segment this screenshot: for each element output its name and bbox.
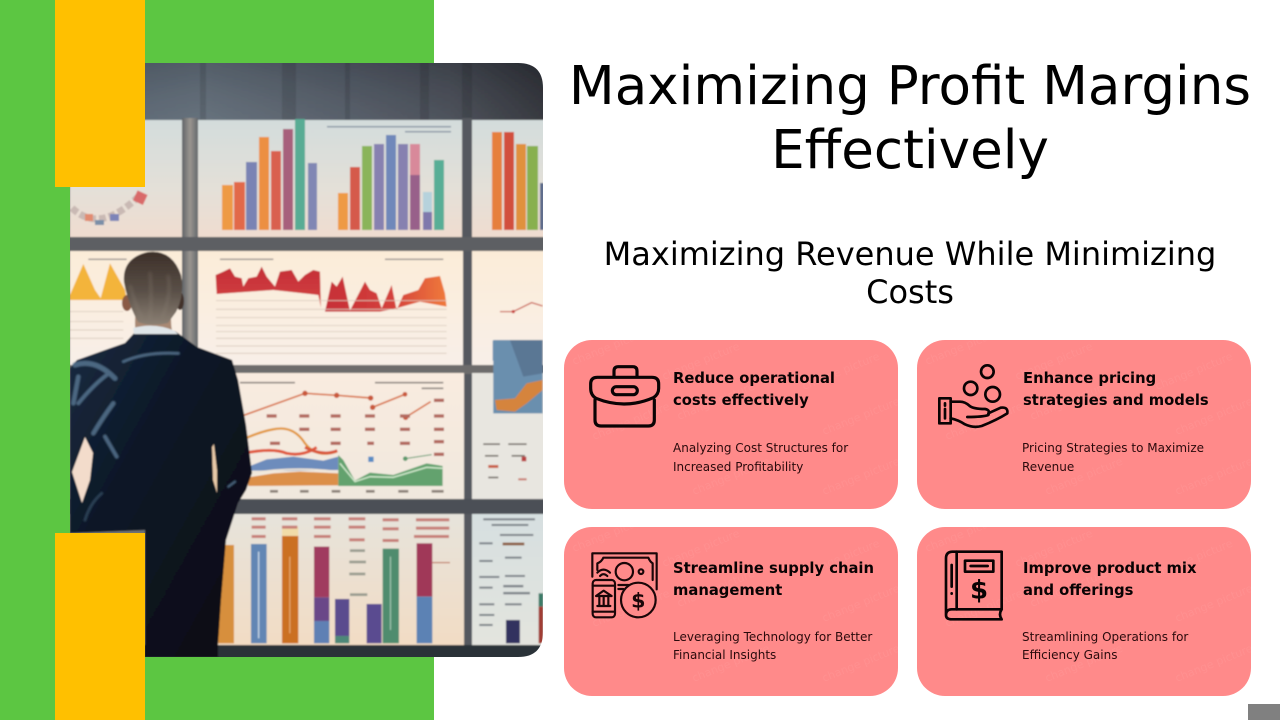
card: streamline supply chain: change picture [690,642,772,685]
card: improve product mix: change picture [1043,642,1125,685]
icon: book with dollar sign [944,550,1004,621]
card: streamline supply chain: change picture [675,567,757,610]
subtitle [604,235,1216,311]
card: enhance pricing: change picture [1028,380,1110,423]
heading: Improve product mix [1023,560,1196,577]
card: improve product mix: change picture [943,587,1025,630]
heading [673,560,874,599]
grey corner box [1248,704,1280,720]
card: enhance pricing [917,340,1251,509]
card: streamline supply chain: change picture [800,537,882,580]
card: improve product mix: change picture [1028,567,1110,610]
heading: strategies and models [1023,392,1209,409]
description: Revenue [1022,460,1074,474]
description: Increased Profitability [673,460,803,474]
head [134,316,172,330]
donut fragments panel A [72,190,148,225]
card: reduce operational costs: change picture [660,340,742,383]
heading [1023,560,1196,599]
bars row 1 [222,119,544,230]
description: Analyzing Cost Structures for [673,441,848,455]
panels row 3 [234,372,466,500]
card: reduce operational costs: change picture [690,455,772,498]
heading: management [673,582,782,599]
card: improve product mix: change picture [1153,537,1235,580]
card: reduce operational costs: change picture [675,380,757,423]
gaps between arms and body [72,437,93,503]
panels row 4 [198,514,464,645]
title: Effectively [771,119,1049,181]
card: improve product mix: change picture [1013,527,1095,570]
subtitle: Costs [866,273,954,311]
heading: Reduce operational [673,370,835,387]
panels row 2 [70,251,182,365]
icon: hand with coins [938,364,1009,428]
heading [673,370,835,409]
heading: Streamline supply chain [673,560,874,577]
card: reduce operational costs [564,340,898,509]
description: Financial Insights [673,648,776,662]
panels row 1 [70,120,182,237]
heading: and offerings [1023,582,1133,599]
icon: book with dollar sign: $ [970,575,988,605]
yellow block: top [55,0,145,187]
description [673,630,872,662]
heading [1023,370,1209,409]
man's suit [70,331,252,657]
green background band [0,0,434,720]
card: streamline supply chain: change picture [660,527,742,570]
description [673,441,848,474]
description: Streamlining Operations for [1022,630,1188,644]
heading: Enhance pricing [1023,370,1156,387]
description [1022,630,1188,662]
card: enhance pricing: change picture [943,400,1025,443]
icon: money, phone and coin: $ [631,588,646,612]
card: reduce operational costs: change picture [590,400,672,443]
card: streamline supply chain: change picture [590,587,672,630]
icon: briefcase [589,365,660,428]
card: enhance pricing: change picture [1043,455,1125,498]
card: enhance pricing: change picture [1153,350,1235,393]
card: improve product mix [917,527,1251,696]
yellow block: bottom [55,533,145,720]
card: enhance pricing: change picture [1013,340,1095,383]
description [1022,441,1204,474]
card: streamline supply chain [564,527,898,696]
card: reduce operational costs: change picture [800,350,882,393]
description: Pricing Strategies to Maximize [1022,441,1204,455]
icon: money, phone and coin [591,552,658,618]
title: Maximizing Profit Margins [569,55,1251,117]
description: Leveraging Technology for Better [673,630,872,644]
photo: businessman viewing chart wall [70,63,543,657]
description: Efficiency Gains [1022,648,1117,662]
title [569,55,1251,181]
subtitle: Maximizing Revenue While Minimizing [604,235,1216,273]
heading: costs effectively [673,392,809,409]
